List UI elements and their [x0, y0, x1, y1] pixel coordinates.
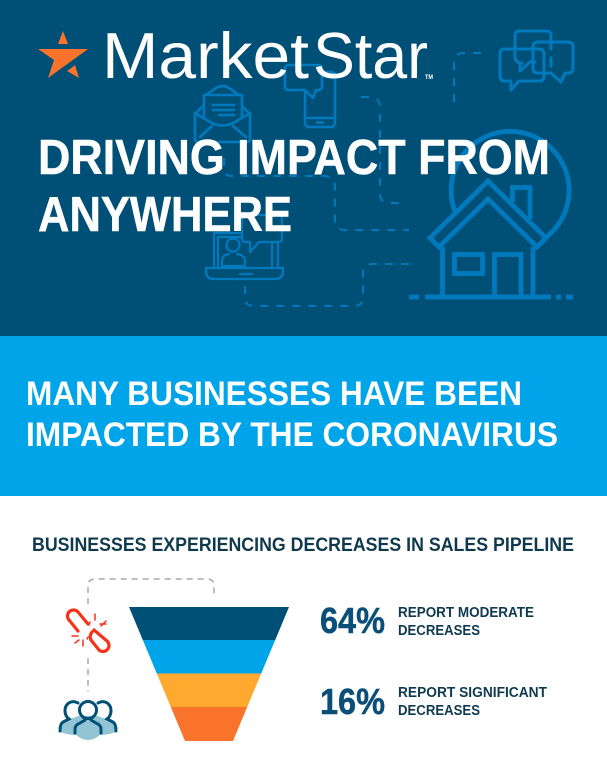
dashed connector: people to funnel	[88, 579, 214, 692]
banner heading: IMPACTED BY THE CORONAVIRUS	[26, 416, 558, 454]
icon: orange star	[38, 31, 88, 78]
banner heading	[26, 375, 558, 454]
banner heading: MANY BUSINESSES HAVE BEEN	[26, 375, 522, 413]
panel: coronavirus banner	[0, 336, 607, 496]
stat: 64 percent: DECREASES	[398, 623, 480, 639]
logo: MarketStar: Market	[102, 19, 309, 92]
header background icons	[195, 31, 573, 306]
title: ANYWHERE	[38, 188, 292, 242]
stat: 16 percent: REPORT SIGNIFICANT	[398, 685, 547, 701]
icon: broken chain link	[67, 610, 109, 652]
chart: funnel	[129, 607, 289, 741]
stat: 16 percent: 16%	[320, 681, 385, 722]
stat: 16 percent	[320, 681, 547, 722]
title	[38, 131, 550, 242]
icon: people group	[60, 702, 116, 740]
panel: sales pipeline	[0, 496, 607, 772]
stat: 64 percent: REPORT MODERATE	[398, 605, 534, 621]
title: DRIVING IMPACT FROM	[38, 131, 550, 185]
stat: 64 percent: 64%	[320, 600, 385, 641]
logo: MarketStar	[38, 19, 433, 92]
icon: envelope	[195, 86, 250, 142]
dashed connector paths	[224, 53, 481, 306]
section heading: BUSINESSES EXPERIENCING DECREASES IN SALES PIPELINE	[32, 535, 574, 556]
icon: house with sun circle	[409, 131, 573, 297]
logo: MarketStar: Star	[313, 19, 428, 92]
logo: MarketStar: TM	[425, 75, 433, 81]
panel: header	[0, 0, 607, 336]
icon: smartphone with speech bubble	[285, 65, 335, 127]
icon: laptop with video call	[206, 215, 283, 279]
stat: 16 percent: DECREASES	[398, 703, 480, 719]
stat: 64 percent	[320, 600, 534, 641]
icon: chat bubbles	[500, 31, 573, 90]
